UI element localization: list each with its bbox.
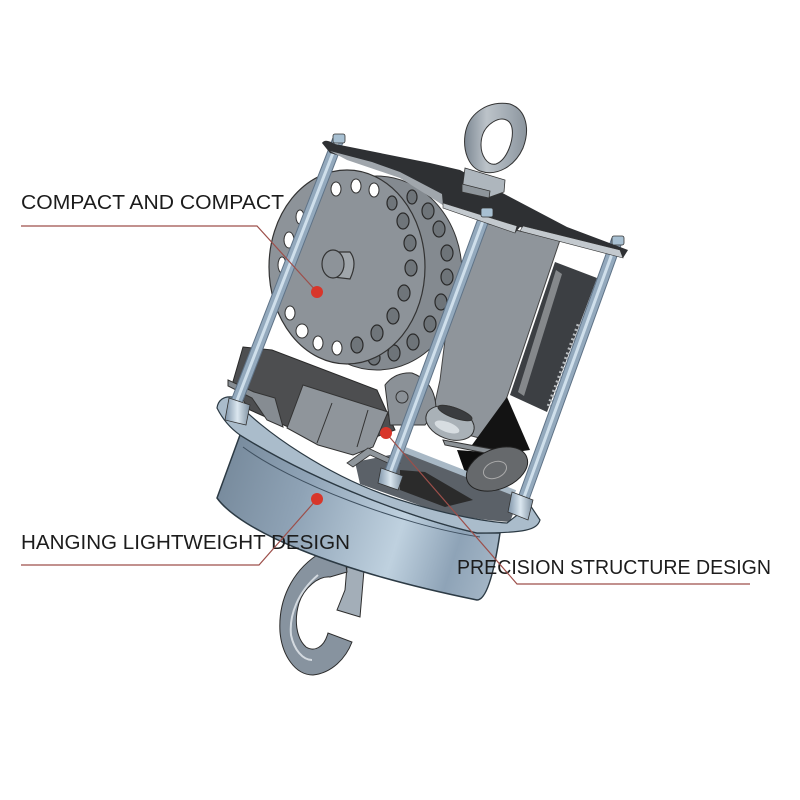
marker dot xyxy=(380,427,392,439)
label text: PRECISION STRUCTURE DESIGN xyxy=(457,557,771,579)
rear wheel disc xyxy=(292,176,462,370)
hoist machine illustration xyxy=(217,103,628,675)
left bracket xyxy=(228,380,283,427)
label text: COMPACT AND COMPACT xyxy=(21,192,284,214)
rear dark electronics box xyxy=(457,262,597,478)
motor end cylinder xyxy=(460,438,534,500)
lower motor body xyxy=(232,347,395,450)
callout: precision structure design xyxy=(380,427,771,584)
guide pulley xyxy=(421,399,497,455)
drum housing xyxy=(217,435,500,600)
top plate xyxy=(322,141,628,258)
leader line xyxy=(386,433,750,584)
rod right xyxy=(523,240,617,500)
drum seam xyxy=(243,447,480,537)
leader line xyxy=(21,226,317,292)
callout: compact and compact xyxy=(21,192,323,298)
gear box block xyxy=(287,385,388,455)
base plate ring xyxy=(217,397,540,533)
rod center xyxy=(390,210,487,473)
marker dot xyxy=(311,493,323,505)
dark base interior xyxy=(355,452,520,522)
top nuts xyxy=(333,134,624,245)
rear gray plate xyxy=(430,222,560,440)
rod left xyxy=(236,140,338,403)
wheel axle xyxy=(322,250,354,279)
marker dot xyxy=(311,286,323,298)
label text: HANGING LIGHTWEIGHT DESIGN xyxy=(21,532,350,554)
hook xyxy=(280,555,364,675)
back rim of base plate xyxy=(405,450,515,493)
callout: hanging lightweight design xyxy=(21,493,350,565)
dark drum cavity xyxy=(400,470,473,507)
bottom rod collars xyxy=(225,398,533,520)
front wheel disc xyxy=(269,170,425,364)
stair bracket xyxy=(347,448,400,467)
eye bolt xyxy=(462,103,527,198)
lever bracket xyxy=(385,373,436,425)
leader line xyxy=(21,499,317,565)
